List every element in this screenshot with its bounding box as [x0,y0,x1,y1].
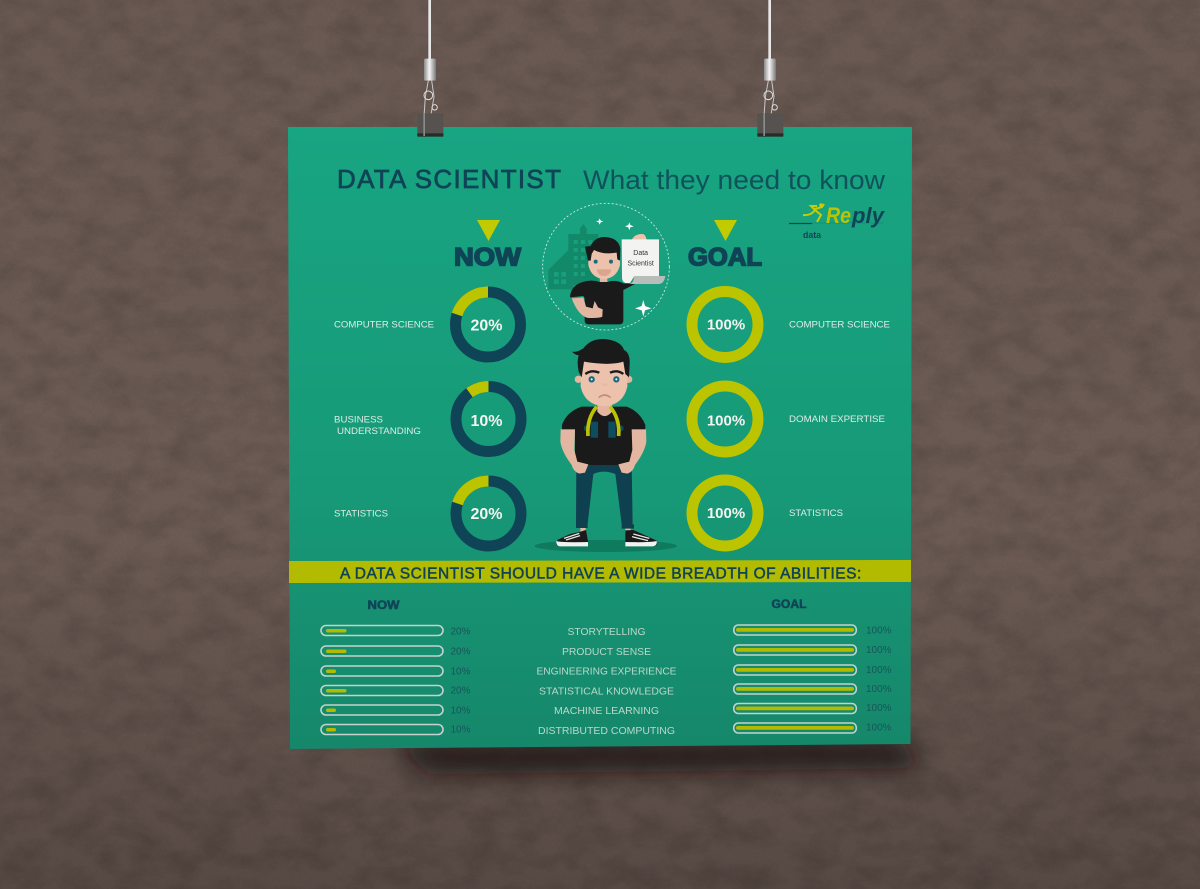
goal progress bars: 100% [866,703,892,714]
legs [576,463,633,527]
logo: Reply data: data [803,230,822,241]
hanging clip right [757,0,783,137]
ring: now computer science 20%: 20% [470,318,503,334]
head [588,247,620,279]
yellow banner: A DATA SCIENTIST SHOULD HAVE A WIDE BREADTH OF ABILITIES: [340,566,862,582]
now progress bars: 20% [450,646,471,658]
left skill labels: BUSINESS [334,414,383,424]
heading: NOW with arrow: NOW [454,244,521,272]
body [600,277,607,285]
heading: GOAL with arrow [688,220,762,272]
icon: buildings [548,224,598,289]
logo: Reply data: ply [851,203,886,228]
ability labels: STATISTICAL KNOWLEDGE [539,686,674,698]
yellow banner [289,560,911,583]
now progress bars: 10% [450,666,471,678]
ability labels: PRODUCT SENSE [562,646,651,658]
now progress bars: 10% [450,706,471,716]
subheading: GOAL: GOAL [772,599,806,611]
now progress bars: 10% [450,724,471,736]
heading: GOAL with arrow: GOAL [688,244,762,272]
ability labels: STORYTELLING [568,626,646,638]
neck [597,402,612,416]
ring: goal computer science 100%: 100% [707,316,745,334]
torso [562,407,645,465]
logo: Reply data: Re [826,203,851,228]
ring: now statistics 20%: 20% [470,506,503,523]
right skill labels [789,320,890,518]
ring: goal statistics 100% [692,480,758,546]
ability labels: ENGINEERING EXPERIENCE [536,666,676,678]
left skill labels: STATISTICS [334,508,388,518]
hair [572,339,630,377]
poster shadow [390,738,925,774]
shoes [557,530,588,545]
ring: now computer science 20% [456,292,520,357]
title: What they need to know [583,165,886,195]
goal progress bars: 100% [866,665,892,676]
ground shadow [534,540,677,552]
now progress bars [321,626,471,736]
ability labels: DISTRIBUTED COMPUTING [538,725,675,737]
left skill labels: COMPUTER SCIENCE [334,320,434,330]
goal progress bars: 100% [866,626,892,636]
headphones [591,422,598,438]
poster sheet [288,127,912,749]
ring: goal statistics 100%: 100% [707,505,745,522]
illustration: data scientist goal figure [543,203,669,330]
eyebrows and eyes [585,371,623,374]
arms [560,429,588,474]
goal progress bars: 100% [866,722,892,734]
ring: goal domain expertise 100%: 100% [707,412,745,430]
right skill labels: COMPUTER SCIENCE [789,320,890,330]
right skill labels: DOMAIN EXPERTISE [789,414,885,424]
goal progress bars: 100% [866,645,892,656]
ring: now business understanding 10%: 10% [470,413,503,430]
ring: goal domain expertise 100% [692,386,758,452]
icon: sparkles [596,218,651,317]
illustration: data scientist goal figure: Data [633,250,648,257]
now progress bars: 20% [450,686,471,696]
ability labels: MACHINE LEARNING [554,705,659,717]
title: DATA SCIENTIST [337,164,562,194]
hanging clip left [417,0,443,137]
now progress bars: 20% [450,626,471,638]
ring: goal computer science 100% [692,292,758,358]
head [575,376,582,383]
logo: Reply data [789,203,886,241]
title [337,164,886,195]
ability labels [536,626,676,737]
left skill labels: UNDERSTANDING [337,426,421,436]
left skill labels [334,320,434,518]
goal progress bars: 100% [866,684,892,695]
arm with thumb up [572,297,603,318]
heading: NOW with arrow [454,220,521,272]
subheading: NOW: NOW [368,600,400,612]
ring: now business understanding 10% [456,386,521,452]
ring: now statistics 20% [456,481,521,546]
right skill labels: STATISTICS [789,508,843,518]
illustration: data scientist goal figure: Scientist [627,260,654,267]
goal progress bars [734,625,892,734]
paper [632,234,647,244]
illustration: confused main character [534,339,677,552]
